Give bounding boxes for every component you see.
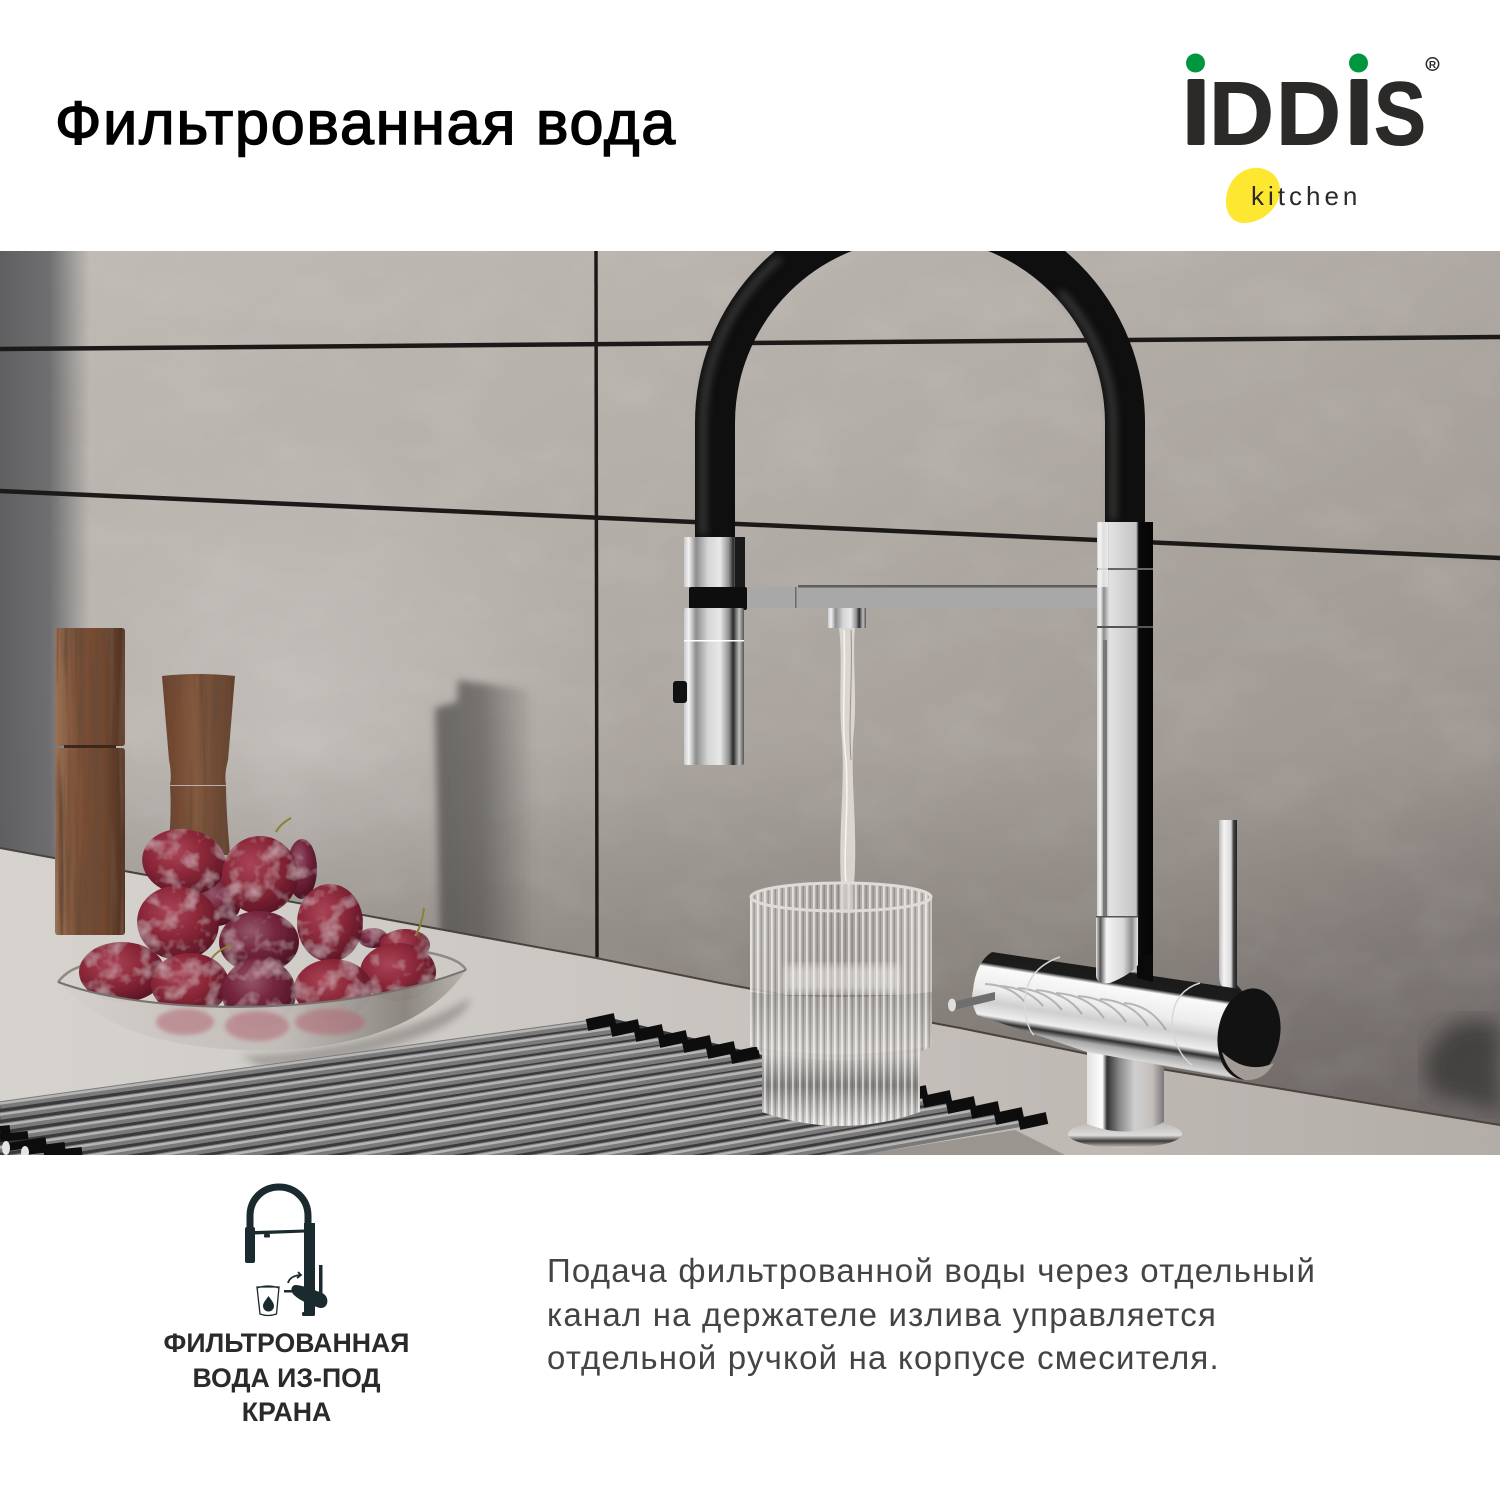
logo wordmark: D <box>1276 64 1341 164</box>
logo wordmark <box>1184 63 1426 164</box>
icon: glass with drop <box>257 1286 279 1316</box>
plum reflections <box>156 1009 365 1041</box>
rack black end caps <box>587 1019 1047 1124</box>
faucet: black flexible hose <box>715 218 1125 540</box>
wall tile grout lines <box>0 251 1500 958</box>
column base over body <box>1096 916 1153 983</box>
plum fruits <box>79 823 436 1028</box>
glass empty part <box>750 883 932 995</box>
body end cap <box>1210 983 1288 1085</box>
faucet: hose highlight <box>703 258 1113 535</box>
shadow of mills on wall <box>435 680 536 952</box>
glass water part <box>750 992 932 1054</box>
rack left caps <box>0 1129 82 1158</box>
wall background <box>0 251 1500 1155</box>
faucet: handle lever <box>1219 820 1244 993</box>
icon: arrow <box>288 1272 301 1283</box>
stream inside glass <box>840 885 853 913</box>
bowl front rim <box>58 970 466 1007</box>
plum stems <box>212 818 424 958</box>
logo wordmark: D <box>1209 64 1274 164</box>
glass rim <box>751 883 931 911</box>
logo wordmark: I <box>1184 63 1209 163</box>
logo kitchen word: kitchen <box>1251 181 1361 211</box>
icon caption: ФИЛЬТРОВАННАЯ <box>164 1328 409 1358</box>
logo yellow blob <box>1226 168 1280 223</box>
rack base <box>0 1019 1033 1155</box>
bowl front glass <box>58 970 466 1051</box>
faucet: spray head <box>673 537 747 765</box>
roll-up drying rack <box>0 1019 1047 1303</box>
logo wordmark: I <box>1346 63 1372 163</box>
icon caption: ВОДА ИЗ-ПОД <box>192 1362 381 1392</box>
icon caption <box>164 1328 409 1427</box>
registered mark: R <box>1429 60 1437 71</box>
faucet: horizontal body <box>948 952 1288 1085</box>
photo: kitchen faucet scene <box>0 251 1500 1155</box>
logo: IDDIS kitchen <box>1184 54 1440 223</box>
title: Фильтрованная вода <box>55 89 677 157</box>
description text: отдельной ручкой на корпусе смесителя. <box>547 1339 1220 1376</box>
plums in glass bowl <box>58 818 466 1051</box>
body rings <box>1025 957 1200 1065</box>
glass bottom step <box>762 1052 920 1126</box>
logo wordmark: S <box>1374 64 1426 164</box>
glass ribs <box>750 883 932 1126</box>
pepper mill: tall <box>55 628 125 935</box>
rack rails <box>0 1022 1033 1303</box>
description text <box>547 1252 1316 1376</box>
faucet: column <box>1097 522 1153 972</box>
bowl rim back <box>58 952 466 982</box>
description text: Подача фильтрованной воды через отдельный <box>547 1252 1316 1289</box>
countertop <box>0 848 1500 1155</box>
pepper mill: short <box>162 674 235 855</box>
bowl contact shadow <box>240 998 470 1066</box>
logo green dots <box>1186 54 1368 72</box>
body reflection ribs <box>985 984 1166 1030</box>
icon caption: КРАНА <box>242 1397 331 1427</box>
water surface highlight <box>785 965 900 992</box>
icon: faucet <box>245 1187 327 1316</box>
description text: канал на держателе излива управляется <box>547 1296 1217 1332</box>
faucet: crossbar holder <box>745 585 1115 628</box>
rail highlights <box>0 1020 1033 1302</box>
body small spout <box>952 992 995 1010</box>
faucet: filtered water stream <box>839 628 855 885</box>
sink edge <box>860 1130 1065 1155</box>
ribbed glass with water <box>750 883 932 1126</box>
registered mark <box>1426 58 1439 71</box>
icon: faucet with filtered water <box>245 1184 328 1316</box>
faucet: pedestal <box>1068 1035 1182 1148</box>
